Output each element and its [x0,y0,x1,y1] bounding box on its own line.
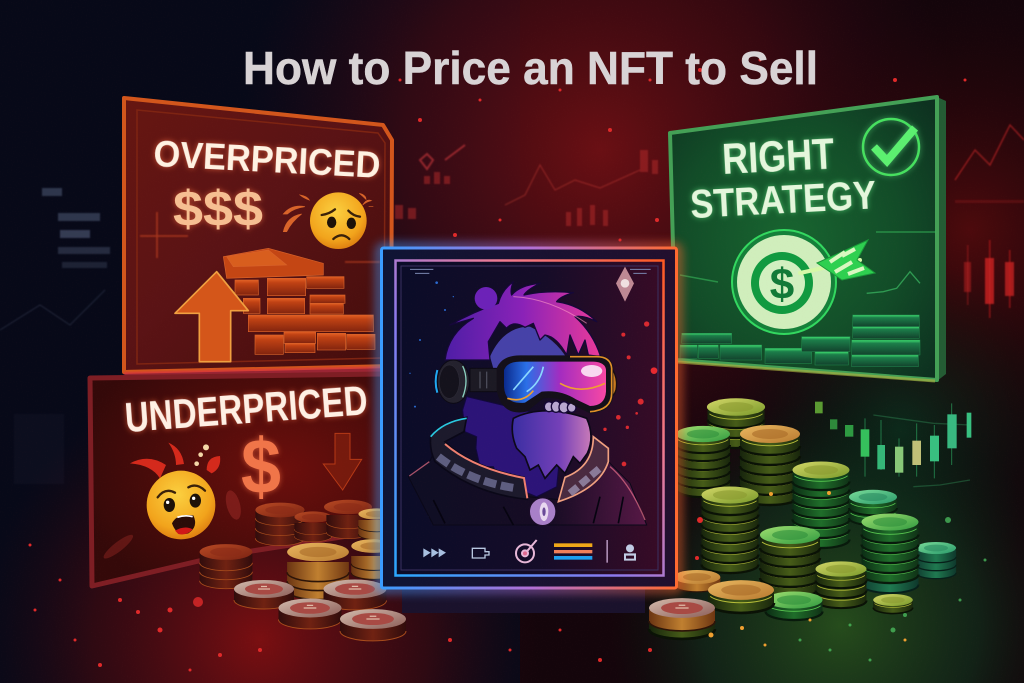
character: jacket [408,447,647,525]
icon: bricks stack [223,248,375,354]
dollar signs: $$$ [173,181,263,237]
pedestal [402,586,645,613]
panel: underpriced [90,374,386,586]
dollar sign: $ [241,422,281,510]
heading: strategy: STRATEGY [689,173,877,227]
character: headphone [436,360,469,403]
character: fur [463,397,560,497]
small trend line [867,272,920,293]
character: pendant [529,498,556,526]
icon: colour bars [554,543,592,560]
card divider [401,526,657,531]
icon: camera [472,548,489,558]
heading: underpriced: UNDERPRICED [123,376,369,441]
character: hair [445,282,601,360]
character: face [490,327,567,380]
heading: right: RIGHT [721,129,835,184]
background chart: right red candles [955,125,1024,318]
panel: right strategy [670,97,946,381]
icon: down arrow [323,433,362,490]
heading: overpriced: OVERPRICED [153,133,381,186]
right coins [649,398,956,639]
character: teeth [544,401,576,413]
icon: dollar target with arrow [732,230,875,334]
icon: check mark circle [863,119,919,175]
icon: target [516,540,537,562]
panel: overpriced [124,98,395,380]
icon: dollar target with arrow: $ [770,260,794,309]
icon: worried emoji [283,192,373,249]
character: collar [430,417,608,502]
character: hair bun [475,287,497,310]
icon: green bricks [680,315,920,367]
character: beard [512,411,591,478]
background chart: left blue bars [0,188,110,484]
card decorations [409,267,657,517]
background chart: right green candles [815,402,971,487]
icon row [423,540,636,563]
icon: fast forward [423,548,446,557]
icon: profile [624,544,636,561]
background chart: top centre red line and candles [395,145,658,226]
icon: shocked emoji [101,443,244,562]
icon: up arrow [175,272,248,362]
left coins [200,500,406,641]
panel: NFT card [380,247,678,589]
title: How to Price an NFT to Sell [243,42,818,94]
character: goggles [470,355,617,413]
